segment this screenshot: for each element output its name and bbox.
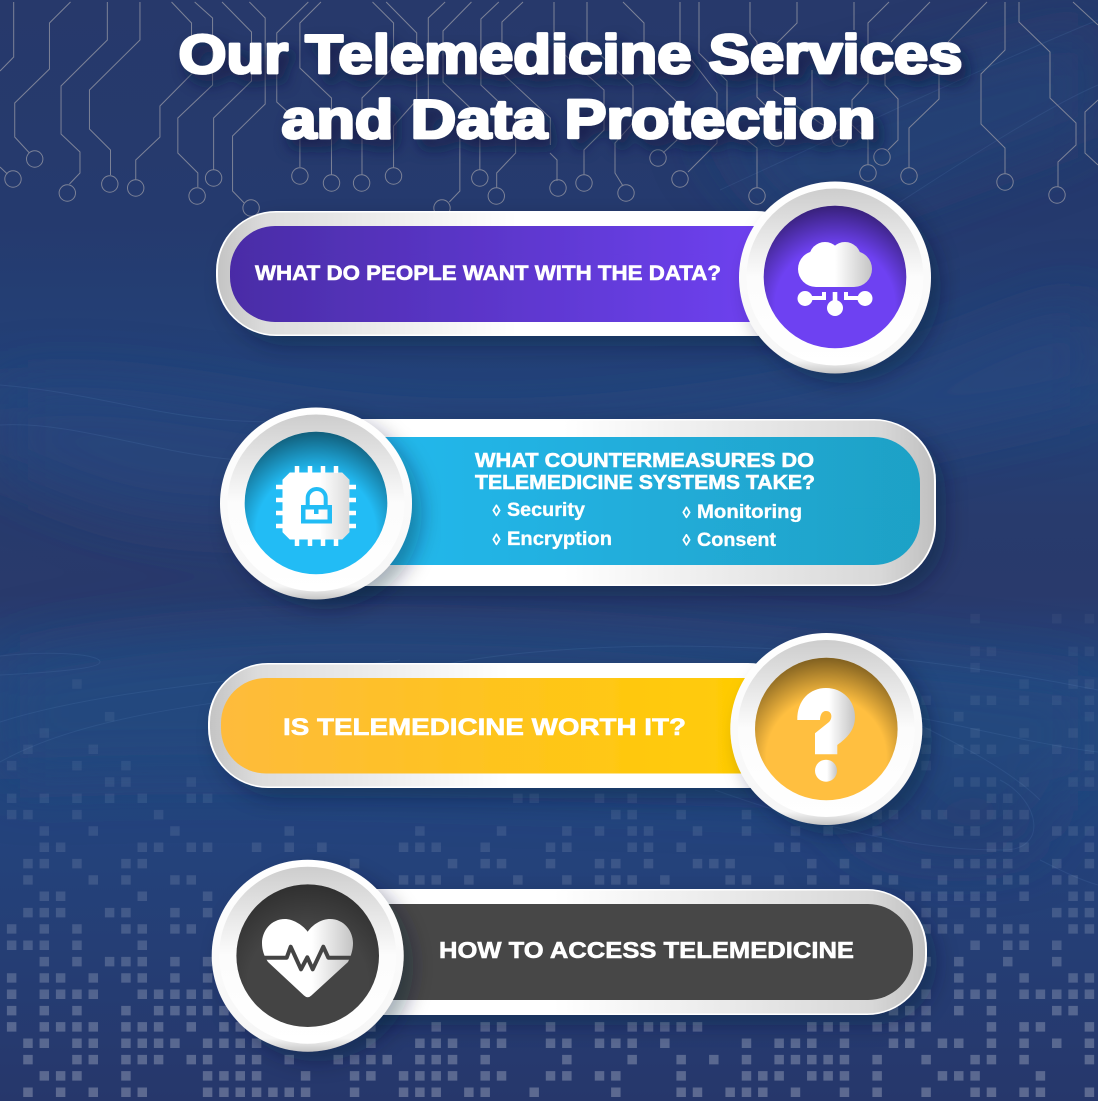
list of countermeasures: ◊ — [682, 505, 690, 522]
heading: IS TELEMEDICINE WORTH IT? — [283, 714, 686, 741]
heading — [475, 449, 815, 494]
heading: WHAT COUNTERMEASURES DO — [475, 449, 814, 472]
panel: is telemedicine worth it — [208, 633, 922, 825]
pill background — [208, 663, 811, 788]
list of countermeasures: Consent — [697, 530, 777, 551]
list of countermeasures: ◊ — [682, 532, 690, 550]
panel: what countermeasures do telemedicine systems take — [220, 408, 936, 600]
icon: cloud network — [739, 182, 931, 374]
icon: heart with pulse — [212, 860, 404, 1052]
list of countermeasures — [492, 500, 802, 551]
title — [178, 23, 962, 150]
icon: chip with lock — [220, 408, 412, 600]
pill background — [250, 889, 927, 1015]
panel: how to access telemedicine — [212, 860, 927, 1052]
pill background — [216, 211, 820, 336]
heading: HOW TO ACCESS TELEMEDICINE — [439, 937, 854, 963]
heading: TELEMEDICINE SYSTEMS TAKE? — [475, 471, 815, 494]
panel: what do people want with the data — [216, 182, 931, 374]
list of countermeasures: ◊ — [492, 503, 500, 520]
pixel grid pattern — [7, 619, 1094, 1092]
list of countermeasures: Encryption — [507, 529, 612, 550]
icon: question mark — [730, 633, 922, 825]
title: Our Telemedicine Services — [178, 23, 962, 85]
title: and Data Protection — [282, 88, 876, 150]
pill background — [260, 419, 936, 586]
heading: WHAT DO PEOPLE WANT WITH THE DATA? — [255, 262, 721, 285]
list of countermeasures: Monitoring — [697, 502, 802, 523]
circuit lines pattern — [0, 2, 1098, 216]
list of countermeasures: ◊ — [492, 532, 500, 549]
list of countermeasures: Security — [507, 500, 585, 521]
